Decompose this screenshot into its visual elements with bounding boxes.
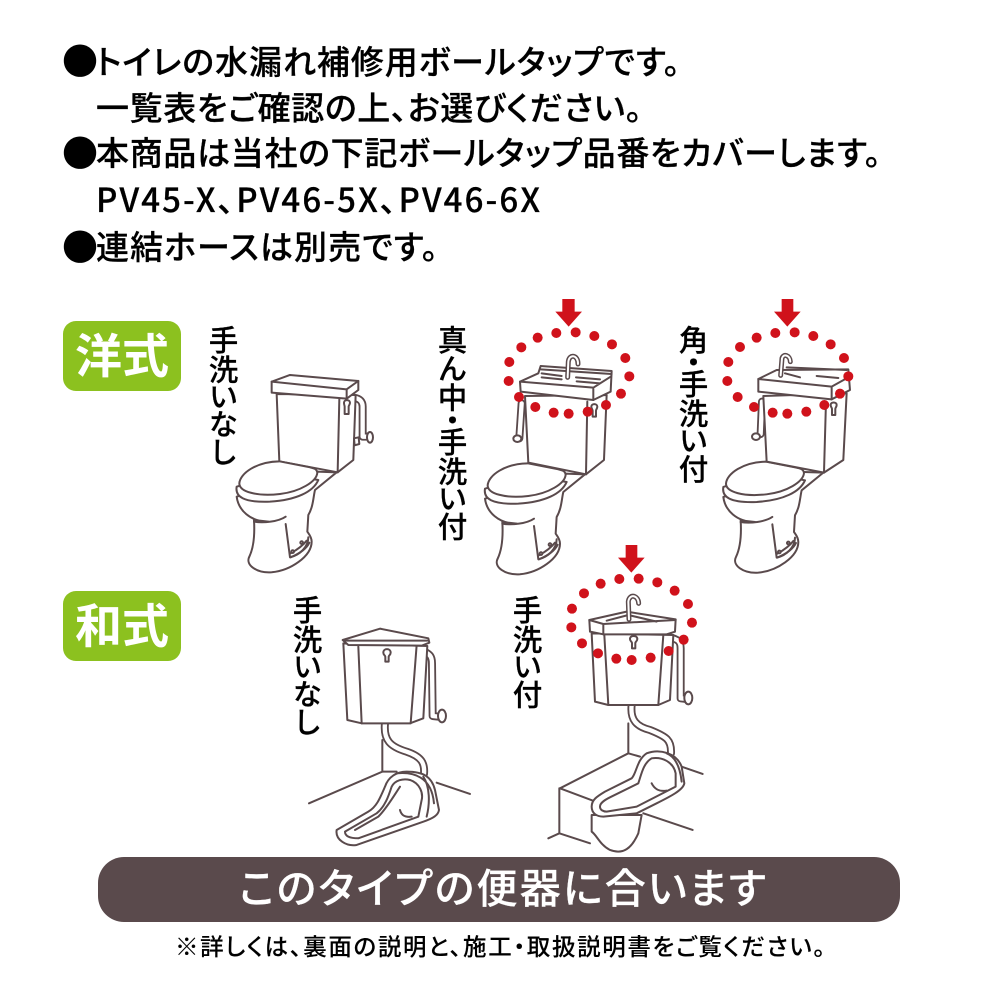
illustration: squat toilet without hand wash xyxy=(309,629,470,845)
illustration: squat toilet with hand wash xyxy=(548,596,703,852)
heading text: product notes: 一覧表をご確認の上、お選びください。 xyxy=(96,82,642,130)
dotted highlight and arrow: corner hand wash tank xyxy=(722,299,853,419)
heading text: product notes: 本商品は当社の下記ボールタップ品番をカバーします。 xyxy=(96,127,881,175)
banner: fits these toilet types xyxy=(98,855,900,922)
heading text: product notes: トイレの水漏れ補修用ボールタップです。 xyxy=(96,36,680,84)
illustration: western toilet with centre hand wash xyxy=(485,356,612,574)
heading text: product notes: PV45-X、PV46-5X、PV46-6X xyxy=(96,174,540,222)
banner: fits these toilet types: このタイプの便器に合います xyxy=(239,855,766,915)
label: corner hand wash: 角・手洗い付 xyxy=(672,325,714,484)
illustration: western toilet with corner hand wash xyxy=(723,355,850,573)
heading text: product notes xyxy=(62,33,881,271)
dotted highlight and arrow: centre hand wash tank xyxy=(504,299,634,419)
label: hand wash (japanese): 手洗い付 xyxy=(506,595,548,710)
dotted highlight and arrow: squat toilet tank xyxy=(566,545,697,665)
footnote: ※詳しくは、裏面の説明と、施工・取扱説明書をご覧ください。 xyxy=(175,928,825,962)
heading text: product notes: 連結ホースは別売です。 xyxy=(96,221,438,269)
badge: japanese style: 和式 xyxy=(75,588,169,657)
label: centre hand wash: 真ん中・手洗い付 xyxy=(432,325,474,541)
heading text: product notes: ● xyxy=(62,33,98,85)
heading text: product notes: ● xyxy=(62,125,98,177)
illustration: western toilet without hand wash xyxy=(236,375,373,572)
label: no hand wash (western): 手洗いなし xyxy=(202,325,244,466)
heading text: product notes: ● xyxy=(62,219,98,271)
label: no hand wash (japanese): 手洗いなし xyxy=(286,595,328,736)
badge: western style: 洋式 xyxy=(75,318,169,387)
